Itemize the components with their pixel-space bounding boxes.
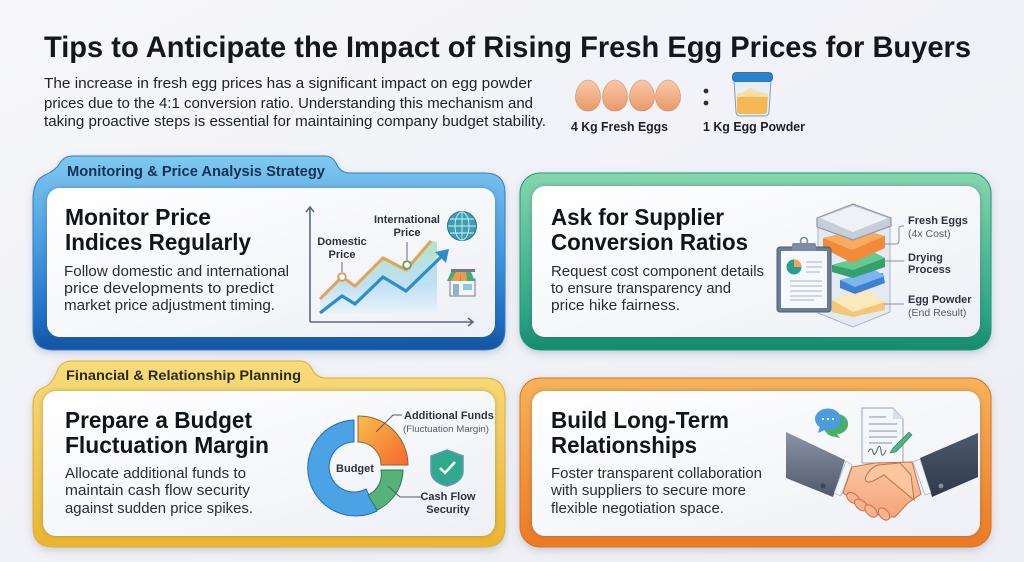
tab label: Financial & Relationship Planning [66,367,301,383]
label: cash flow security: Cash Flow [420,491,476,503]
label: international price [374,214,440,239]
label: additional funds [403,410,494,435]
panel frame [520,173,991,350]
body text: market price adjustment timing. [64,298,275,314]
label: fresh eggs: 4 Kg Fresh Eggs [571,120,668,134]
panel: monitor price indices [33,156,505,350]
ratio colon [704,89,708,105]
body text [550,466,762,517]
heading: Conversion Ratios [551,229,748,255]
heading: Prepare a Budget [65,407,252,433]
intro text: The increase in fresh egg prices has a significant impact on egg powder [44,75,532,92]
tab label: Monitoring & Price Analysis Strategy [67,164,325,180]
label: additional funds: (Fluctuation Margin) [403,424,489,435]
intro text [44,75,546,130]
label: drying process: Drying [908,252,943,264]
heading: Indices Regularly [65,229,251,255]
label: domestic price: Domestic [317,236,367,248]
conversion ratio graphic [571,72,805,134]
panel frame [520,378,991,547]
callout leader lines [884,226,904,304]
inner card [532,391,980,536]
inner card [532,186,980,337]
body text: flexible negotiation space. [551,501,724,517]
icon: layered jar [817,204,891,327]
heading [551,204,748,255]
label: domestic price [317,236,367,261]
label: cash flow security [420,491,476,516]
icon: contract document [862,408,912,463]
body text: Allocate additional funds to [65,466,246,482]
donut chart [308,416,408,516]
label: international price: International [374,214,440,226]
body text: with suppliers to secure more [550,483,746,499]
label: egg powder: Egg Powder [908,294,972,306]
heading: Monitor Price [65,204,211,230]
intro text: prices due to the 4:1 conversion ratio. Understanding this mechanism and [44,95,533,112]
heading [551,407,729,458]
panel: long-term relationships [520,378,991,547]
label: cash flow security: Security [426,504,471,516]
panel: supplier conversion ratios [520,173,991,350]
heading [65,407,269,458]
label: fresh eggs: (4x Cost) [908,228,951,240]
leader lines [376,415,421,497]
heading [65,204,251,255]
label: egg powder: (End Result) [908,307,966,319]
body text: price hike fairness. [551,298,680,314]
label: drying process [908,252,951,276]
body text [551,264,764,314]
body text: Follow domestic and international [64,264,289,280]
body text: against sudden price spikes. [65,501,253,517]
inner card [47,188,495,337]
icon: four fresh eggs [576,80,680,111]
icon: globe [448,212,476,240]
title: Tips to Anticipate the Impact of Rising Fresh Egg Prices for Buyers [44,31,971,64]
intro text: taking proactive steps is essential for maintaining company budget stability. [44,113,546,130]
body text [65,466,253,517]
icon: store [447,269,475,296]
heading: Fluctuation Margin [65,432,269,458]
panel frame with tab [33,156,505,350]
label: additional funds: Additional Funds [404,410,494,422]
body text: Foster transparent collaboration [551,466,762,482]
icon: shield [431,450,463,486]
body text: Request cost component details [551,264,764,280]
label: domestic price: Price [329,249,355,261]
heading: Ask for Supplier [551,204,724,230]
inner card [43,391,495,536]
body text: maintain cash flow security [65,483,251,499]
label: fresh eggs: Fresh Eggs [908,215,968,227]
label: egg powder: 1 Kg Egg Powder [703,120,805,134]
icon: clipboard [777,238,831,312]
label: budget: Budget [336,463,374,475]
label: drying process: Process [908,264,951,276]
icon: handshake [786,432,978,522]
label: egg powder [908,294,972,319]
icon: egg powder jar [732,72,772,116]
panel: budget fluctuation margin [33,361,505,547]
icon: chat bubbles [815,408,848,438]
label: fresh eggs [908,215,968,240]
body text: price developments to predict [64,281,274,297]
line chart [306,207,476,326]
heading: Build Long-Term [551,407,729,433]
panel frame with tab [33,361,505,547]
label: international price: Price [394,227,420,239]
body text: to ensure transparency and [551,281,731,297]
heading: Relationships [551,432,697,458]
body text [64,264,289,314]
